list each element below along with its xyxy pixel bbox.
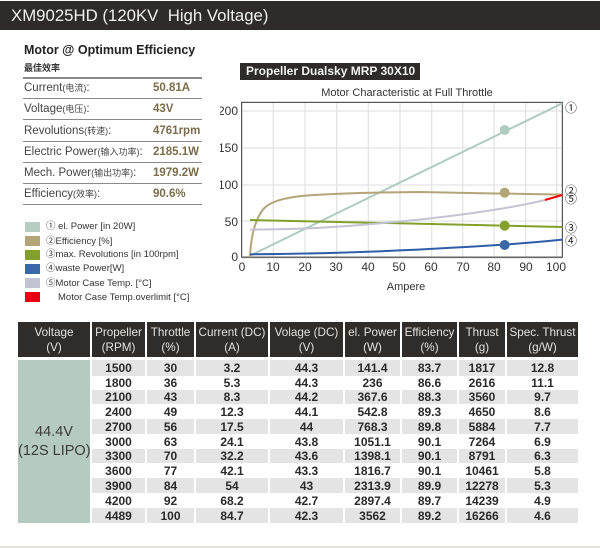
legend label: el. power: ① el. Power [in 20W] [46,221,135,232]
data table: 89.2 [418,508,441,522]
data table: Throttle [151,326,190,338]
data table: 1800 [105,376,132,390]
legend label: case temp: ⑤Motor Case Temp. [°C] [46,278,152,289]
data table: (%) [161,340,180,354]
data table: 4200 [105,494,132,508]
rule [23,77,202,78]
data table: 7.7 [534,420,551,434]
data table: 77 [164,464,177,478]
row: revolutions: 4761rpm [153,124,200,136]
data table: 5.8 [534,464,551,478]
data table: 36 [164,376,177,390]
data table: 3560 [469,390,495,404]
data table: 54 [225,478,239,492]
curve: efficiency [250,188,562,257]
data table: 90.1 [418,449,441,463]
curve number labels: ⑤ [565,190,577,207]
propeller label: Propeller Dualsky MRP 30X10 [246,64,415,78]
data table: 542.8 [357,404,388,418]
row: efficiency [23,184,202,205]
data table: 63 [164,434,177,448]
legend label: waste power: ④waste Power[W] [46,263,124,274]
curve number labels: ① [565,99,577,116]
row: electric power: Electric Power(输入功率): [24,146,143,158]
data table [18,322,578,523]
data table: 141.4 [357,361,388,375]
data table: 236 [362,376,383,390]
data table: 89.8 [418,420,441,434]
row: revolutions: Revolutions(转速): [24,124,111,136]
data table: 8.3 [224,390,240,404]
data table: 43 [164,390,177,404]
curve: motor case temp [250,195,562,230]
row: current: Current(电流): [24,82,90,94]
data table: 14239 [465,494,499,508]
data table: 56 [164,420,177,434]
legend label: overlimit: Motor Case Temp.overlimit [°C] [58,292,189,303]
x axis labels: 0 [239,260,246,274]
data table: 3000 [105,434,132,448]
row: voltage: Voltage(电压): [24,103,90,115]
data table: 1817 [469,361,495,375]
data table: (%) [420,340,439,354]
data table: (12S LIPO) [18,442,91,458]
data table: 3562 [359,508,386,522]
data table: 2897.4 [354,494,391,508]
data table: 17.5 [220,420,244,434]
data table: 3600 [105,464,132,478]
data table: 2700 [105,420,132,434]
row: voltage [23,99,202,120]
data table: (RPM) [102,340,135,354]
x axis labels: 90 [519,260,533,274]
data table: 4650 [469,404,495,418]
data table: 3900 [105,478,132,492]
data table: 10461 [465,464,499,478]
x axis labels: 70 [456,260,470,274]
data table: 44.1 [295,404,318,418]
data table: 24.1 [220,434,244,448]
y axis labels [218,104,238,264]
data table: 86.6 [418,376,441,390]
data table: 43.3 [295,464,318,478]
curve: el. power [250,103,562,256]
curve number labels [565,99,577,249]
data table: 49 [164,404,177,418]
x axis labels: 50 [392,260,406,274]
x axis labels: 20 [298,260,312,274]
data table: (V) [299,340,314,354]
data table: Current (DC) [199,326,265,338]
row: efficiency: 90.6% [153,188,186,200]
data table: 6.3 [534,449,551,463]
header bar [0,1,600,30]
data table: Spec. Thrust [509,326,576,338]
row: mech power: 1979.2W [153,167,199,179]
data table: 44.2 [295,390,318,404]
heading: motor at optimum efficiency: Motor @ Optimum Efficiency [24,43,195,57]
row: mech power [23,163,202,184]
x axis labels: 30 [329,260,343,274]
data table: 70 [164,449,177,463]
legend swatch: revolutions [25,250,40,260]
legend swatch: el. power [25,222,40,232]
data table: 1500 [105,361,132,375]
data table: 100 [160,508,181,522]
data table: 5.3 [534,478,551,492]
panel: motor at optimum efficiency [23,43,202,205]
data table: 9.7 [534,390,551,404]
row: mech power: Mech. Power(输出功率): [24,167,136,179]
legend swatch: efficiency [25,236,40,246]
row: electric power [23,142,202,163]
legend label: efficiency: ②Efficiency [%] [46,236,112,247]
data table: (W) [363,340,382,354]
data table: 12278 [465,478,499,492]
row: current: 50.81A [153,82,190,94]
x axis labels: 80 [487,260,501,274]
data table: 1398.1 [354,449,391,463]
row: electric power: 2185.1W [153,146,199,158]
data table: 84.7 [220,508,244,522]
data table: 42.7 [295,494,318,508]
x axis labels: 40 [361,260,375,274]
data table: 4489 [105,508,132,522]
row: revolutions [23,120,202,142]
data table: el. Power [348,326,397,338]
chart title: Motor Characteristic at Full Throttle [321,87,493,99]
x axis labels [239,260,566,274]
header bar: XM9025HD (120KV High Voltage) [11,6,268,25]
data table: 44.3 [295,376,318,390]
data table: 89.3 [418,404,441,418]
data table: 16266 [465,508,499,522]
data table: 12.3 [220,404,244,418]
data table: 42.1 [220,464,244,478]
data table: 88.3 [418,390,441,404]
data table: 1051.1 [354,434,391,448]
subheading: 最佳效率 [24,63,60,73]
row: voltage: 43V [153,103,173,115]
legend [25,220,189,303]
y axis labels: 0 [231,250,238,264]
data table: 2616 [469,376,495,390]
data table: 6.9 [534,434,551,448]
data table: 768.3 [357,420,388,434]
data table: 83.7 [418,361,441,375]
data table: Volage (DC) [275,326,338,338]
data table: 84 [164,478,177,492]
x axis labels: 10 [266,260,280,274]
curve number labels: ② [565,182,577,199]
data table: 367.6 [357,390,388,404]
data table: 5.3 [224,376,240,390]
data table: 43.6 [295,449,318,463]
curve number labels: ④ [565,232,577,249]
data table: 7264 [469,434,495,448]
data table: 42.3 [295,508,318,522]
data table: 90.1 [418,464,441,478]
data table: Efficiency [405,326,454,338]
data table: 2100 [105,390,132,404]
data table: Voltage [34,326,74,338]
data table: 44.3 [295,361,318,375]
data table: 90.1 [418,434,441,448]
row: efficiency: Efficiency(效率): [24,188,100,200]
data table: 4.9 [534,494,551,508]
data table: 44.4V [35,424,73,440]
data table: Propeller [95,326,142,338]
curve number labels: ③ [565,219,577,236]
data table: 12.8 [531,361,554,375]
data table: 2400 [105,404,132,418]
data table: 44 [300,420,313,434]
legend swatch: overlimit [25,292,40,302]
y axis labels: 50 [225,215,238,229]
data table: 5884 [469,420,495,434]
data table: 32.2 [220,449,244,463]
legend swatch: waste power [25,264,40,274]
x axis title: Ampere [387,281,425,293]
data table: (g/W) [528,340,557,354]
data table: (g) [475,340,489,354]
data table: (A) [224,340,240,354]
bottom band [0,546,600,548]
data table: (V) [46,340,62,354]
legend label: revolutions: ③max. Revolutions [in 100rpm] [46,249,179,260]
data table: 4.6 [534,508,551,522]
data table: 3300 [105,449,132,463]
data table: 43.8 [295,434,318,448]
data table: 68.2 [220,494,244,508]
legend swatch: case temp [25,278,40,288]
x axis labels: 60 [424,260,438,274]
data table: 3.2 [224,361,240,375]
data table: 43 [300,478,313,492]
data table: 8791 [469,449,495,463]
curve: max revolutions [250,220,562,231]
data table: 8.6 [534,404,551,418]
data table: 30 [164,361,177,375]
data table: 11.1 [531,376,554,390]
data table: 89.7 [418,494,441,508]
data table: 2313.9 [354,478,391,492]
data table: 1816.7 [354,464,391,478]
chart: motor characteristic [220,87,577,293]
data table: 89.9 [418,478,441,492]
row: current [23,78,202,99]
x axis labels: 100 [546,260,566,274]
data table: 92 [164,494,177,508]
data table: Thrust [465,326,499,338]
curve: waste power [250,240,562,254]
